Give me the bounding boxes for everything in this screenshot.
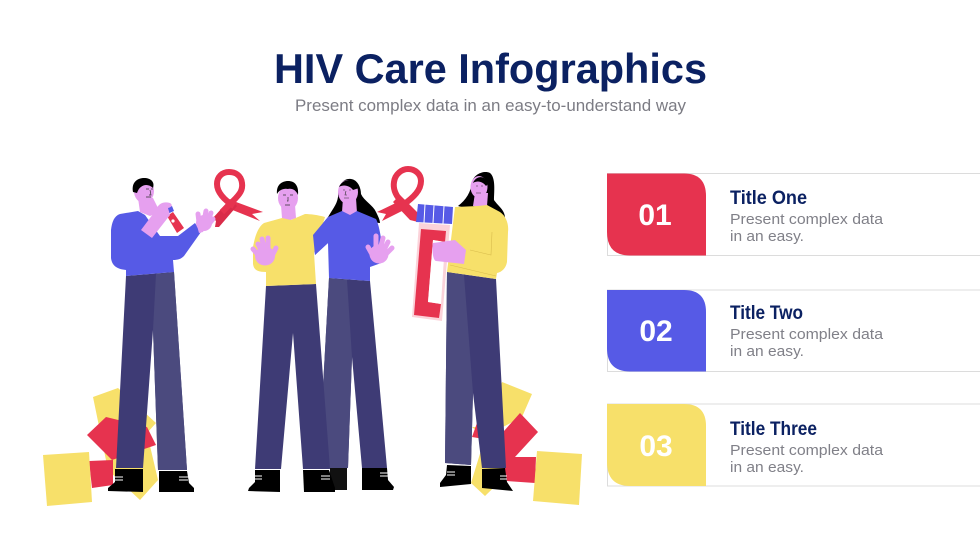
hand [253, 238, 276, 266]
number 03: 03 [639, 430, 673, 463]
figure: woman in blue [313, 179, 394, 490]
panel: item 3 [607, 404, 980, 486]
description three: Present complex data [730, 442, 884, 459]
number 02: 02 [639, 315, 673, 348]
badge 03 [607, 404, 706, 486]
panel: item 2 [607, 290, 980, 372]
shoes [440, 465, 471, 487]
heading three: Title Three [730, 419, 817, 440]
shoes [248, 470, 280, 492]
hand [196, 211, 213, 233]
woman arm over shoulder [313, 217, 335, 255]
neck and head [342, 198, 357, 216]
sweater [313, 211, 384, 281]
number 01: 01 [638, 199, 672, 232]
figure: man in yellow [248, 181, 335, 492]
sweater [253, 214, 325, 286]
trousers [445, 272, 506, 468]
shoes [108, 469, 143, 492]
description three: in an easy. [730, 459, 804, 476]
illustration: confetti left [43, 388, 158, 506]
hand [432, 240, 466, 264]
neck and head [281, 205, 296, 221]
title: HIV Care Infographics [274, 45, 707, 92]
test tube [412, 204, 453, 321]
figure: woman with test tube [412, 172, 513, 491]
trousers [116, 272, 187, 470]
subtitle: Present complex data in an easy-to-understand way [295, 96, 686, 115]
neck and head [138, 198, 160, 216]
icon: ribbon left [213, 172, 263, 227]
panel: item 1 [607, 174, 980, 256]
hair [327, 179, 380, 223]
trousers [323, 278, 387, 468]
sweater [447, 205, 508, 279]
badge 01 [607, 174, 706, 256]
bottle [165, 209, 186, 235]
description two: in an easy. [730, 343, 804, 360]
badge 02 [607, 290, 706, 372]
description one: in an easy. [730, 228, 804, 245]
heading two: Title Two [730, 303, 803, 324]
heading one: Title One [730, 188, 807, 209]
description one: Present complex data [730, 211, 884, 228]
illustration: confetti right [471, 382, 582, 505]
icon: ribbon right [377, 169, 421, 222]
description two: Present complex data [730, 326, 884, 343]
shoes [330, 468, 347, 490]
hair [458, 172, 505, 218]
hand [368, 236, 392, 264]
figure: man with bottle [108, 178, 213, 492]
sweater [111, 211, 201, 276]
arm [141, 202, 172, 238]
trousers [255, 284, 330, 469]
neck and head [473, 193, 488, 208]
